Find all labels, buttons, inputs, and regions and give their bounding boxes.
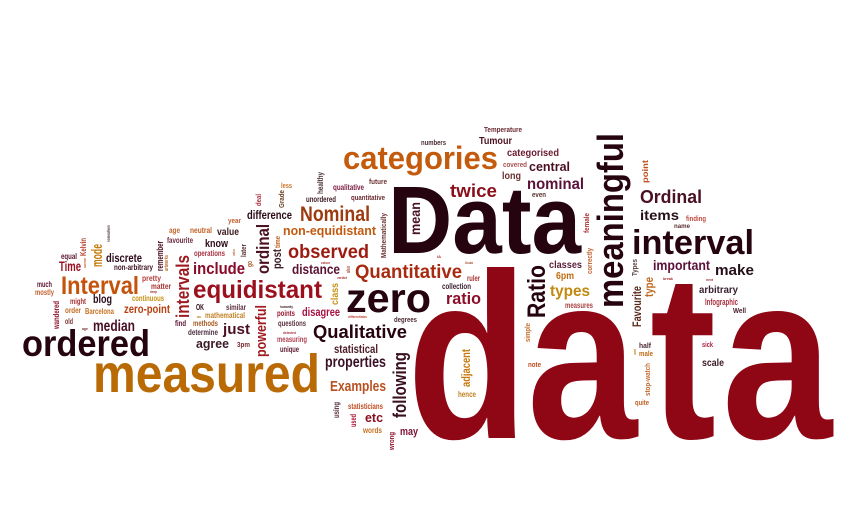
- word: ordinal: ordinal: [253, 224, 273, 274]
- left cluster of small words: blog: [93, 292, 112, 306]
- right cluster of small words: arbitrary: [699, 284, 738, 296]
- left cluster of small words: somewhere: [106, 225, 111, 242]
- word: zero: zero: [346, 275, 431, 321]
- lower-left cluster of small words: wrong: [389, 432, 396, 451]
- right cluster of small words: quite: [635, 400, 649, 407]
- left cluster of small words: age: [82, 326, 89, 331]
- word: nominal: nominal: [527, 176, 584, 193]
- centre-left cluster of small words: qualitative: [333, 183, 364, 192]
- lower-left cluster of small words: unique: [280, 345, 299, 354]
- lower-left cluster of small words: words: [362, 426, 382, 435]
- centre-right cluster of small words: Usula: [465, 260, 474, 265]
- centre-left cluster of small words: healthy: [316, 172, 325, 194]
- right cluster of small words: sick: [702, 342, 713, 349]
- centre-left cluster of small words: difference: [247, 210, 292, 222]
- word: meaningful: meaningful: [590, 133, 631, 308]
- centre-left cluster of small words: later: [241, 244, 248, 257]
- word: mode: mode: [89, 244, 106, 267]
- centre-right cluster of small words: collection: [442, 282, 471, 291]
- right cluster of small words: Types: [632, 259, 639, 276]
- centre-left cluster of small words: year: [228, 218, 241, 225]
- right cluster of small words: used: [632, 349, 637, 355]
- word: properties: properties: [325, 354, 386, 371]
- word: intervals: intervals: [173, 255, 193, 318]
- centre-left cluster of small words: value: [217, 226, 239, 238]
- centre-right cluster of small words: Temperature: [484, 127, 522, 134]
- right cluster of small words: point: [641, 160, 650, 183]
- right cluster of small words: break: [663, 276, 674, 281]
- lower-left cluster of small words: OK: [196, 303, 204, 312]
- lower-left cluster of small words: measuring: [277, 335, 307, 344]
- centre-left cluster of small words: time: [275, 236, 282, 248]
- right cluster of small words: name: [674, 224, 691, 230]
- centre-left cluster of small words: distance: [292, 261, 340, 277]
- lower-left cluster of small words: mathematical: [205, 311, 245, 320]
- centre-right cluster of small words: central: [529, 159, 570, 174]
- word: Ratio: Ratio: [523, 265, 551, 318]
- lower-left cluster of small words: methods: [193, 319, 218, 328]
- lower-left cluster of small words: determine: [188, 328, 218, 337]
- centre-right cluster of small words: long: [502, 170, 521, 182]
- word: Tumour: Tumour: [479, 135, 512, 147]
- left cluster of small words: mostly: [35, 288, 54, 297]
- word: powerful: powerful: [253, 305, 270, 357]
- word: data: data: [407, 226, 834, 489]
- left cluster of small words: non-arbitrary: [114, 262, 153, 272]
- right cluster of small words: finding: [686, 216, 706, 223]
- word: Examples: Examples: [330, 378, 386, 395]
- centre-right cluster of small words: numbers: [421, 140, 446, 147]
- right cluster of small words: Infographic: [705, 297, 738, 307]
- centre-left cluster of small words: Mathematically: [381, 213, 388, 258]
- centre-right cluster of small words: simple: [525, 323, 532, 342]
- word: know: know: [205, 238, 228, 250]
- word: observed: observed: [288, 242, 369, 263]
- lower-left cluster of small words: agree: [196, 336, 229, 351]
- lower-left cluster of small words: used: [349, 414, 358, 427]
- left cluster of small words: artworks: [164, 255, 170, 271]
- word: important: important: [653, 257, 710, 273]
- lower-left cluster of small words: differentiates: [348, 314, 368, 319]
- left cluster of small words: remember: [155, 241, 165, 271]
- word: include: include: [193, 259, 245, 278]
- word: just: just: [222, 321, 250, 338]
- left cluster of small words: pretty: [142, 274, 161, 283]
- centre-left cluster of small words: valor: [231, 249, 236, 256]
- left cluster of small words: neutral: [190, 226, 212, 235]
- left cluster of small words: Time: [59, 258, 81, 274]
- centre-right cluster of small words: categorised: [507, 147, 559, 159]
- word: median: median: [93, 318, 135, 335]
- word: equidistant: equidistant: [193, 276, 323, 304]
- left cluster of small words: age: [169, 226, 180, 235]
- lower-left cluster of small words: humanity: [280, 304, 294, 309]
- word: ordered: ordered: [22, 323, 150, 364]
- left cluster of small words: [35, 225, 212, 331]
- lower-left cluster of small words: statistical: [334, 344, 378, 356]
- left cluster of small words: Barcelona: [85, 307, 114, 316]
- centre-right cluster of small words: note: [528, 362, 541, 369]
- left cluster of small words: some: [82, 257, 87, 268]
- lower-left cluster of small words: may: [400, 426, 419, 438]
- word: following: following: [390, 352, 410, 418]
- centre-right cluster of small words: ruler: [467, 274, 480, 283]
- lower-left cluster of small words: as: [197, 314, 202, 319]
- lower-left cluster of small words: [175, 303, 419, 451]
- lower-left cluster of small words: 3pm: [237, 342, 250, 349]
- centre-left cluster of small words: [194, 172, 388, 305]
- word: Nominal: Nominal: [300, 203, 370, 226]
- centre-right cluster of small words: adjacent: [461, 349, 473, 387]
- left cluster of small words: equal: [61, 252, 77, 261]
- left cluster of small words: might: [70, 297, 86, 306]
- word: interval: interval: [632, 224, 754, 262]
- centre-left cluster of small words: colour: [321, 260, 330, 265]
- left cluster of small words: matter: [151, 282, 171, 291]
- centre-right cluster of small words: female: [584, 213, 591, 233]
- left cluster of small words: old: [65, 317, 73, 326]
- centre-right cluster of small words: [421, 127, 594, 399]
- left cluster of small words: favourite: [167, 236, 193, 245]
- word: measured: measured: [93, 344, 320, 404]
- right cluster of small words: make: [715, 262, 754, 279]
- centre-left cluster of small words: Grade: [279, 190, 286, 208]
- right cluster of small words: type: [644, 277, 656, 297]
- centre-left cluster of small words: class: [330, 283, 341, 305]
- right cluster of small words: stop-watch: [645, 363, 652, 396]
- lower-left cluster of small words: degrees: [394, 317, 417, 324]
- right cluster of small words: scale: [702, 357, 724, 369]
- word: Quantitative: Quantitative: [355, 262, 462, 283]
- centre-left cluster of small words: verdict: [337, 275, 348, 280]
- lower-left cluster of small words: statisticians: [348, 402, 383, 411]
- word: types: types: [550, 283, 590, 300]
- centre-right cluster of small words: even: [532, 192, 546, 199]
- centre-right cluster of small words: IA: [437, 254, 441, 259]
- lower-left cluster of small words: points: [277, 309, 295, 318]
- word: twice: twice: [450, 181, 497, 201]
- centre-left cluster of small words: quantitative: [351, 195, 385, 202]
- right cluster of small words: next: [706, 277, 714, 282]
- left cluster of small words: discrete: [106, 251, 142, 265]
- right cluster of small words: male: [639, 351, 653, 358]
- word: Interval: Interval: [61, 272, 139, 300]
- centre-right cluster of small words: 6pm: [556, 270, 574, 282]
- lower-left cluster of small words: find: [175, 319, 186, 328]
- left cluster of small words: wandered: [52, 301, 61, 330]
- lower-left cluster of small words: etc: [365, 410, 383, 425]
- centre-left cluster of small words: future: [369, 179, 387, 186]
- centre-left cluster of small words: post: [272, 249, 284, 269]
- centre-right cluster of small words: classes: [549, 259, 582, 271]
- word: categories: categories: [343, 140, 498, 176]
- left cluster of small words: Kelvin: [79, 238, 88, 256]
- lower-left cluster of small words: disagree: [302, 307, 340, 319]
- centre-left cluster of small words: also: [346, 266, 352, 273]
- word: Qualitative: Qualitative: [313, 321, 407, 342]
- centre-left cluster of small words: less: [281, 183, 292, 190]
- centre-left cluster of small words: unordered: [306, 195, 336, 204]
- centre-right cluster of small words: measures: [565, 301, 593, 310]
- centre-right cluster of small words: correctly: [587, 248, 594, 274]
- word: Ordinal: Ordinal: [640, 186, 702, 207]
- centre-left cluster of small words: deal: [256, 194, 263, 206]
- lower-left cluster of small words: detected: [283, 330, 296, 335]
- centre-right cluster of small words: hence: [458, 390, 476, 399]
- lower-left cluster of small words: similar: [226, 303, 246, 312]
- right cluster of small words: half: [639, 343, 652, 350]
- word: Data: Data: [388, 167, 582, 274]
- left cluster of small words: much: [37, 280, 52, 289]
- lower-left cluster of small words: questions: [278, 319, 306, 328]
- right cluster of small words: Well: [733, 308, 746, 315]
- right cluster of small words: [630, 160, 754, 407]
- centre-right cluster of small words: covered: [503, 162, 527, 169]
- left cluster of small words: order: [65, 306, 81, 315]
- centre-left cluster of small words: go: [247, 261, 254, 267]
- centre-left cluster of small words: non-equidistant: [283, 223, 377, 238]
- lower-left cluster of small words: using: [332, 402, 341, 418]
- word: mean: mean: [407, 202, 423, 235]
- centre-left cluster of small words: operations: [194, 249, 225, 258]
- left cluster of small words: deep: [150, 289, 157, 294]
- right cluster of small words: Favourite: [630, 286, 644, 327]
- right cluster of small words: items: [640, 207, 679, 223]
- left cluster of small words: zero-point: [124, 302, 170, 316]
- left cluster of small words: continuous: [132, 294, 164, 303]
- word: ratio: ratio: [446, 290, 481, 308]
